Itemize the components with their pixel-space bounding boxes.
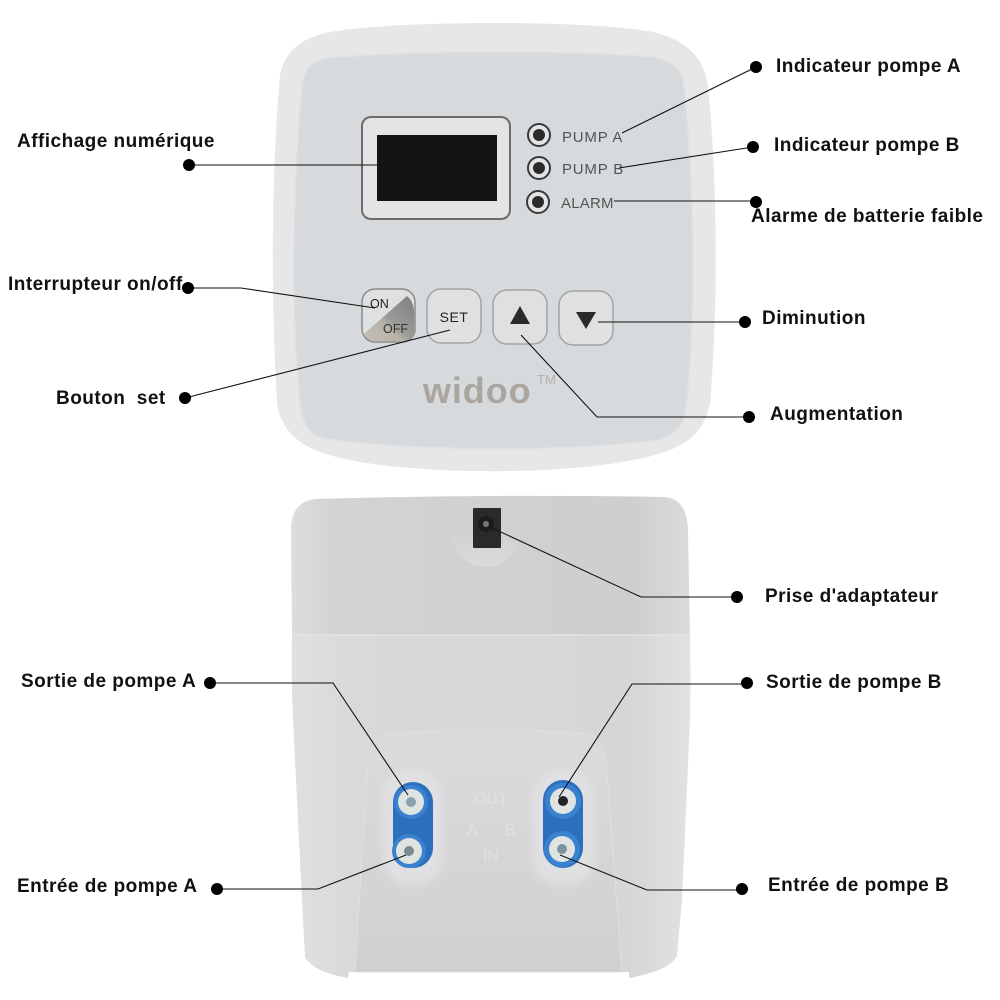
- digital display: [362, 117, 510, 219]
- button: up: [493, 290, 547, 344]
- button: down: [559, 291, 613, 345]
- callout: Interrupteur on/off: Interrupteur on/off: [8, 274, 183, 295]
- callout: Diminution: [598, 308, 866, 329]
- callout: Sortie de pompe A: Sortie de pompe A: [21, 671, 196, 692]
- callout: Entrée de pompe B: [560, 855, 949, 896]
- callout: Entrée de pompe B: Entrée de pompe B: [768, 875, 949, 896]
- housing seam: [292, 634, 690, 636]
- moulded port labels: B: [505, 822, 516, 839]
- moulded port labels: IN: [483, 848, 499, 865]
- callout: Augmentation: [521, 335, 903, 425]
- callout: Affichage numérique: [17, 131, 405, 171]
- button: set: [427, 289, 481, 343]
- moulded port labels: A: [467, 822, 478, 839]
- callout: Interrupteur on/off: [8, 274, 375, 308]
- callout: Augmentation: Augmentation: [770, 404, 903, 425]
- callout: Alarme de batterie faible: [614, 196, 983, 227]
- button: on/off: ON: [370, 297, 389, 311]
- device face plate: [294, 52, 693, 449]
- callout: Indicateur pompe B: Indicateur pompe B: [774, 135, 960, 156]
- indicator: alarm: [527, 191, 614, 213]
- callout: Sortie de pompe A: [21, 671, 408, 795]
- callout: Prise d'adaptateur: [490, 527, 939, 607]
- callout: Bouton set: Bouton set: [56, 388, 166, 409]
- ports: pump B: [532, 769, 595, 885]
- button: on/off: OFF: [383, 322, 408, 336]
- callout: Sortie de pompe B: [559, 672, 942, 797]
- callout: Sortie de pompe B: Sortie de pompe B: [766, 672, 942, 693]
- indicator: pump B: [528, 157, 624, 179]
- callout: Entrée de pompe A: Entrée de pompe A: [17, 876, 197, 897]
- callout: Diminution: Diminution: [762, 308, 866, 329]
- panel: back view of controller: [291, 496, 690, 978]
- moulded port labels: OUT: [474, 791, 508, 808]
- lower housing: [292, 635, 690, 978]
- panel: front view of controller: [273, 23, 716, 471]
- callout: Indicateur pompe B: [619, 135, 960, 168]
- device outer shell: [273, 23, 716, 471]
- callout: Indicateur pompe A: Indicateur pompe A: [776, 56, 961, 77]
- power jack: [451, 508, 521, 567]
- callout: Indicateur pompe A: [622, 56, 961, 133]
- callout: Bouton set: [56, 330, 450, 409]
- button: set: SET: [440, 309, 468, 325]
- logo: widoo: widoo: [422, 370, 531, 411]
- callout: Alarme de batterie faible: Alarme de batterie faible: [751, 206, 983, 227]
- rear recessed panel: [355, 730, 622, 972]
- button: on/off: [362, 289, 415, 342]
- indicator: pump B: PUMP B: [562, 161, 624, 178]
- logo: widoo: TM: [537, 372, 556, 387]
- indicator: pump A: PUMP A: [562, 129, 623, 146]
- callout: Entrée de pompe A: [17, 855, 406, 897]
- callout: Prise d'adaptateur: Prise d'adaptateur: [765, 586, 939, 607]
- indicator: pump A: [528, 124, 623, 146]
- moulded port labels: [467, 791, 516, 865]
- indicator: alarm: ALARM: [561, 195, 614, 212]
- top housing: [291, 496, 690, 635]
- ports: pump A: [382, 769, 443, 885]
- callout: Affichage numérique: Affichage numérique: [17, 131, 215, 152]
